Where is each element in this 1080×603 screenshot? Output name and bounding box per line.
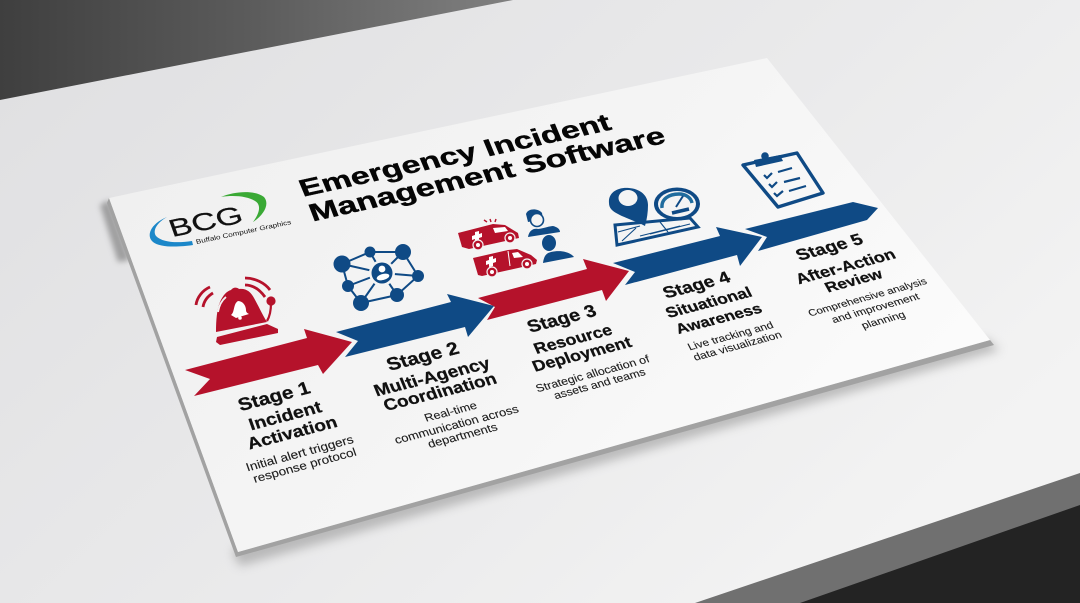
paper shadow bottom — [232, 338, 1000, 566]
stage 5 text: After-Action — [792, 245, 899, 288]
stage 2 text: Multi-Agency — [371, 354, 493, 400]
stage 3 text — [524, 301, 652, 402]
icon: responders — [526, 209, 574, 263]
icon: ambulances — [458, 219, 537, 277]
stage 1 text: Incident — [246, 398, 324, 434]
icon: clipboard — [743, 152, 823, 207]
stage 1 text — [235, 378, 358, 485]
stage 2 text: Real-time — [422, 399, 479, 424]
ambulance one — [458, 219, 519, 250]
stage 2 text: Coordination — [380, 369, 499, 414]
stage 4 text: Awareness — [673, 301, 765, 337]
stage 3 text: assets and teams — [552, 367, 648, 402]
stage 5 text: planning — [860, 310, 908, 331]
stage 1 text: Activation — [245, 412, 340, 453]
stage 4 text: Live tracking and — [686, 320, 776, 353]
logo: BCG: Buffalo Computer Graphics — [195, 218, 292, 246]
stage 4 text: Situational — [663, 284, 755, 321]
stage 3 text: Strategic allocation of — [534, 353, 652, 395]
logo: BCG — [150, 192, 292, 247]
icon: alarm — [196, 278, 278, 345]
pin — [609, 188, 648, 226]
stage 4 text: Stage 4 — [659, 268, 733, 302]
stage 5 text — [792, 230, 929, 331]
responder one — [526, 209, 560, 237]
infographic sheet — [109, 58, 990, 552]
icon: map pin and gauge — [609, 188, 700, 245]
table front edge — [695, 473, 1080, 603]
stage 2 text — [371, 338, 521, 451]
paper shadow left — [100, 200, 130, 262]
arrows — [185, 202, 878, 396]
arrow: stage 2 — [336, 294, 494, 357]
gauge — [654, 188, 700, 220]
stage 4 text: data visualization — [691, 330, 784, 363]
stage 3 text: Resource — [531, 321, 615, 357]
stage 5 text: Comprehensive analysis — [806, 276, 929, 319]
dark floor bottom right — [800, 505, 1080, 603]
stage 1 text: Initial alert triggers — [244, 432, 355, 474]
stage 2 text: departments — [426, 420, 499, 451]
dark wall top left — [0, 0, 513, 100]
icon: network — [334, 244, 424, 311]
logo: BCG: BCG — [165, 202, 247, 243]
map — [615, 218, 698, 245]
title: Emergency Incident — [295, 109, 615, 202]
paper edge thickness — [107, 198, 994, 557]
arrow: stage 1 — [185, 329, 352, 396]
stage 3 text: Stage 3 — [524, 301, 599, 336]
responder two — [542, 235, 574, 263]
stage 2 text: Stage 2 — [383, 338, 462, 375]
stage 5 text: Review — [822, 267, 886, 296]
paper sheet — [109, 58, 990, 552]
arrow: stage 3 — [478, 259, 629, 320]
stage 3 text: Deployment — [529, 333, 635, 375]
stage 2 text: communication across — [392, 402, 521, 447]
stage 5 text: and improvement — [830, 292, 922, 326]
arrow: stage 4 — [613, 227, 762, 285]
title: Management Software — [305, 122, 669, 227]
stage 1 text: response protocol — [251, 446, 358, 485]
stage 1 text: Stage 1 — [235, 378, 313, 416]
stage 5 text: Stage 5 — [792, 230, 866, 264]
arrow: stage 5 — [745, 202, 878, 251]
ambulance two — [473, 249, 537, 277]
stage 4 text — [659, 268, 784, 363]
